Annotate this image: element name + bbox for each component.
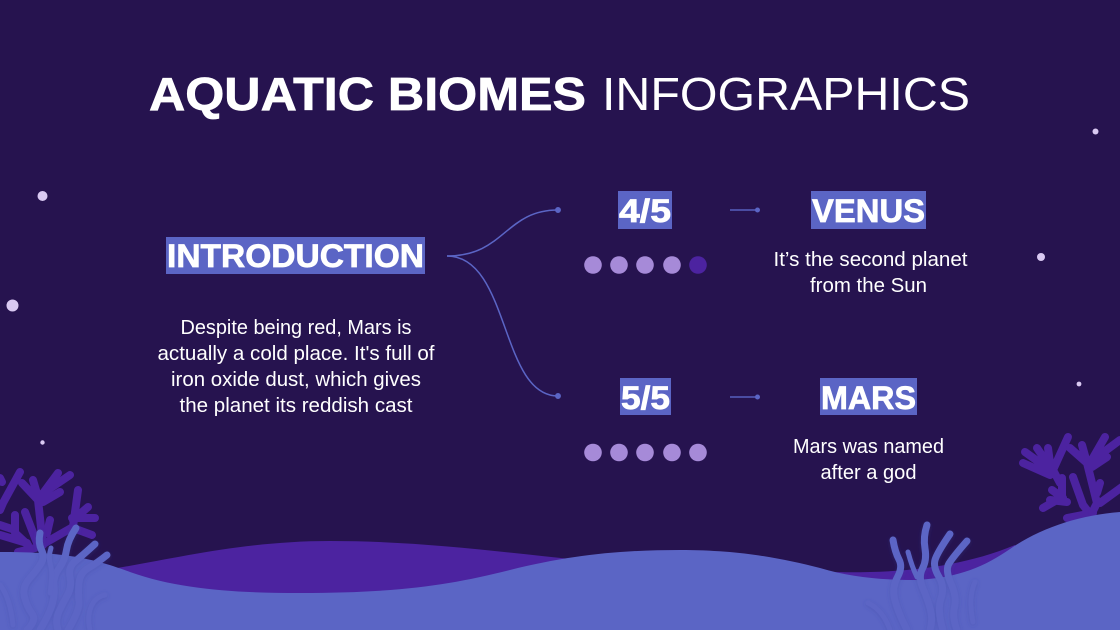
branching connector lines	[447, 208, 560, 398]
back wave	[105, 541, 1040, 600]
rating dots: 5 of 5	[584, 444, 707, 461]
coral: right	[1023, 437, 1120, 518]
title: INFOGRAPHICS	[602, 68, 970, 120]
rating: 4/5: 4/5	[619, 193, 671, 229]
seaweed: right	[868, 525, 975, 630]
text block: venus	[774, 249, 968, 297]
background bubbles	[6, 128, 1098, 445]
title	[149, 68, 970, 120]
heading: introduction: INTRODUCTION	[167, 238, 424, 274]
seaweed: left	[0, 528, 107, 630]
heading: mars: MARS	[821, 380, 916, 416]
heading: venus: VENUS	[812, 193, 925, 229]
coral: left	[0, 472, 95, 552]
text block: mars: Mars was named	[793, 436, 944, 458]
text block: mars: after a god	[820, 462, 916, 484]
text block: venus: from the Sun	[810, 275, 927, 297]
text block: introduction body: Despite being red, Mars is	[180, 317, 412, 339]
arrow: to mars	[730, 394, 760, 400]
text block: introduction body: actually a cold place. It's full of	[158, 343, 435, 365]
arrow: to venus	[730, 208, 760, 212]
text block: venus: It’s the second planet	[774, 249, 968, 271]
title: AQUATIC BIOMES	[149, 68, 586, 120]
text block: introduction body: the planet its reddish cast	[180, 395, 413, 417]
panel: introduction	[158, 237, 435, 417]
text block: mars	[793, 436, 944, 484]
text block: introduction body	[158, 317, 435, 417]
rating dots: 4 of 5	[584, 256, 707, 274]
rating: 5/5: 5/5	[621, 380, 670, 416]
text block: introduction body: iron oxide dust, which gives	[171, 369, 421, 391]
front wave	[0, 512, 1120, 630]
